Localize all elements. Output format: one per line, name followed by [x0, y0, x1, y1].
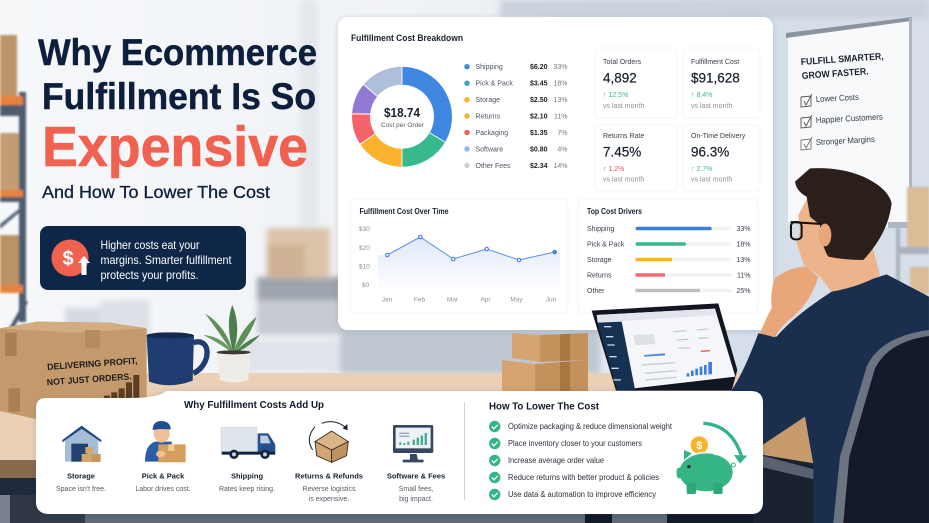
bar chart: top cost drivers: Top Cost Drivers	[587, 207, 642, 216]
icon: dollar with up arrow: $	[62, 248, 74, 270]
bar chart: top cost drivers: 11%	[737, 272, 750, 280]
donut chart	[351, 66, 445, 168]
potted plant	[203, 305, 260, 382]
bar chart: top cost drivers	[578, 199, 758, 313]
text: box slogan: NOT JUST ORDERS.	[47, 371, 132, 387]
legend: Storage	[476, 97, 500, 104]
legend: $3.45	[530, 81, 548, 88]
title: And How To Lower The Cost	[42, 182, 270, 202]
callout: higher costs: Higher costs eat your	[100, 238, 200, 252]
line chart: cost over time: $20	[359, 245, 370, 252]
label: storage: Space isn't free.	[56, 486, 106, 493]
stacked parcels on desk	[502, 333, 588, 391]
bar chart: top cost drivers: 33%	[736, 226, 750, 233]
right shelf boxes	[896, 187, 929, 294]
coffee mug	[147, 332, 207, 385]
line chart: cost over time: Apr	[480, 297, 491, 304]
label: software and fees: Small fees,	[399, 486, 433, 493]
legend: $2.34	[530, 163, 548, 170]
icon: piggy bank with coin	[677, 423, 747, 494]
shelf with boxes	[0, 35, 28, 332]
legend: 7%	[557, 130, 568, 137]
checklist	[489, 421, 673, 500]
hand and forearm	[760, 267, 818, 337]
label: returns and refunds: Reverse logistics	[303, 486, 356, 493]
whiteboard checklist	[801, 92, 883, 150]
line chart: cost over time: $0	[362, 282, 370, 289]
label: shipping: Shipping	[231, 472, 263, 480]
bar chart: top cost drivers: 13%	[736, 257, 750, 264]
legend: 18%	[553, 81, 568, 88]
dashboard panel	[338, 17, 773, 330]
legend: $2.10	[530, 114, 548, 120]
whiteboard	[786, 17, 912, 228]
KPI: fulfillment cost: ↑ 8.4%	[691, 92, 712, 99]
KPI: on-time delivery: 96.3%	[691, 145, 729, 160]
laptop	[592, 303, 737, 391]
whiteboard heading	[800, 51, 885, 82]
heading: how to lower the cost: How To Lower The Cost	[489, 401, 599, 413]
bar chart: top cost drivers: 25%	[736, 288, 750, 295]
bar chart: top cost drivers: Returns	[587, 272, 612, 280]
line chart: cost over time: $30	[359, 226, 370, 233]
KPI: returns rate	[595, 125, 677, 191]
hair	[795, 168, 892, 260]
legend: Shipping	[476, 64, 503, 71]
label: returns and refunds: is expensive.	[309, 496, 349, 503]
label: software and fees: Software & Fees	[387, 472, 445, 480]
bar chart: top cost drivers: Other	[587, 288, 605, 295]
label: shipping: Rates keep rising.	[219, 486, 275, 493]
label: pick and pack	[135, 472, 191, 493]
legend: Software	[476, 146, 503, 154]
legend: $0.80	[530, 146, 548, 154]
label: software and fees: big impact.	[399, 496, 433, 503]
whiteboard checklist: Stronger Margins	[816, 134, 875, 147]
KPI: total orders: vs last month	[603, 103, 644, 110]
bar chart: top cost drivers: 18%	[736, 242, 750, 248]
label: returns and refunds	[295, 472, 363, 503]
title	[38, 32, 317, 202]
glasses	[791, 222, 822, 239]
office chair	[833, 330, 929, 523]
legend: Other Fees	[476, 163, 511, 170]
bar chart: top cost drivers: Shipping	[587, 226, 614, 233]
torso	[732, 274, 929, 523]
checklist: Reduce returns with better product & policies	[508, 473, 659, 482]
icon: returns box	[309, 422, 348, 462]
callout: higher costs	[40, 226, 246, 290]
callout: higher costs: protects your profits.	[100, 268, 198, 282]
icon: piggy bank with coin: $	[696, 440, 702, 452]
KPI: total orders: 4,892	[603, 71, 637, 86]
bar chart: top cost drivers: Storage	[587, 257, 612, 264]
KPI: fulfillment cost	[683, 48, 760, 118]
cardboard box: delivering profit	[0, 322, 147, 427]
legend: $2.50	[530, 97, 548, 104]
KPI: total orders: ↑ 12.5%	[603, 92, 628, 99]
label: shipping	[219, 472, 275, 493]
legend: Returns	[476, 114, 501, 120]
line chart: cost over time: Feb	[414, 297, 425, 304]
line chart: cost over time: Fulfillment Cost Over Time	[360, 207, 449, 216]
title: Expensive	[42, 115, 308, 179]
whiteboard heading: GROW FASTER.	[801, 66, 869, 82]
text: box slogan	[45, 356, 139, 387]
legend: Packaging	[476, 130, 508, 137]
KPI: on-time delivery: ↑ 2.7%	[691, 166, 712, 173]
KPI: fulfillment cost: Fulfillment Cost	[691, 59, 739, 66]
KPI: fulfillment cost: vs last month	[691, 103, 732, 110]
label: storage: Storage	[67, 472, 95, 480]
legend: 4%	[557, 146, 568, 154]
label: pick and pack: Pick & Pack	[142, 472, 185, 480]
checklist: Place inventory closer to your customers	[508, 439, 642, 448]
bottom panel	[36, 391, 763, 514]
KPI: on-time delivery: vs last month	[691, 177, 732, 184]
title: Why Ecommerce	[38, 32, 317, 73]
KPI: returns rate: Returns Rate	[603, 133, 644, 140]
whiteboard checklist: Happier Customers	[816, 112, 883, 125]
line chart: cost over time: Mar	[447, 297, 459, 304]
KPI: on-time delivery: On-Time Delivery	[691, 133, 746, 140]
callout: higher costs: margins. Smarter fulfillment	[100, 253, 232, 267]
line chart: cost over time: Jan	[382, 297, 393, 304]
KPI: fulfillment cost: $91,628	[691, 71, 740, 86]
legend: 13%	[553, 97, 568, 104]
legend: 33%	[553, 64, 568, 71]
heading: why costs add up: Why Fulfillment Costs Add Up	[184, 399, 324, 411]
bar chart: top cost drivers: Pick & Pack	[587, 242, 625, 248]
lower desk and armrest	[753, 417, 929, 523]
neck and face	[797, 193, 880, 292]
label: returns and refunds: Returns & Refunds	[295, 472, 363, 480]
heading: cost breakdown: Fulfillment Cost Breakdown	[351, 33, 463, 44]
KPI: total orders	[595, 48, 677, 118]
whiteboard heading: FULFILL SMARTER,	[800, 51, 884, 68]
line chart: cost over time: $10	[359, 264, 370, 270]
icon: storage warehouse	[62, 426, 101, 462]
legend: Pick & Pack	[476, 81, 513, 88]
legend: 11%	[554, 114, 568, 120]
man at desk	[592, 168, 929, 523]
checklist: Optimize packaging & reduce dimensional weight	[508, 422, 673, 431]
icon: picker with parcel	[145, 421, 186, 462]
checklist: Increase average order value	[508, 456, 604, 465]
legend: $1.35	[530, 130, 548, 137]
line chart: cost over time	[350, 199, 568, 313]
label: software and fees	[387, 472, 445, 503]
KPI: on-time delivery	[683, 125, 760, 191]
legend: $6.20	[530, 64, 548, 71]
label: storage	[56, 472, 106, 493]
donut chart: $18.74	[384, 105, 421, 120]
icon: dollar with up arrow	[52, 240, 90, 276]
KPI: returns rate: 7.45%	[603, 145, 641, 160]
whiteboard checklist: Lower Costs	[816, 92, 859, 104]
ear	[819, 224, 831, 246]
KPI: total orders: Total Orders	[603, 59, 642, 66]
text: box slogan: DELIVERING PROFIT,	[47, 356, 138, 372]
label: pick and pack: Labor drives cost.	[135, 486, 191, 493]
legend	[464, 64, 568, 170]
donut chart: Cost per Order	[381, 122, 425, 129]
KPI: returns rate: vs last month	[603, 177, 644, 184]
icon: software monitor	[393, 425, 433, 462]
legend: 14%	[553, 163, 568, 170]
checklist: Use data & automation to improve efficiency	[508, 490, 656, 499]
line chart: cost over time: Jun	[546, 297, 557, 304]
KPI: returns rate: ↑ 1.2%	[603, 166, 624, 173]
line chart: cost over time: May	[510, 297, 523, 304]
desk surface	[0, 373, 929, 523]
icon: delivery truck	[221, 427, 275, 459]
title: Fulfillment Is So	[42, 76, 316, 117]
